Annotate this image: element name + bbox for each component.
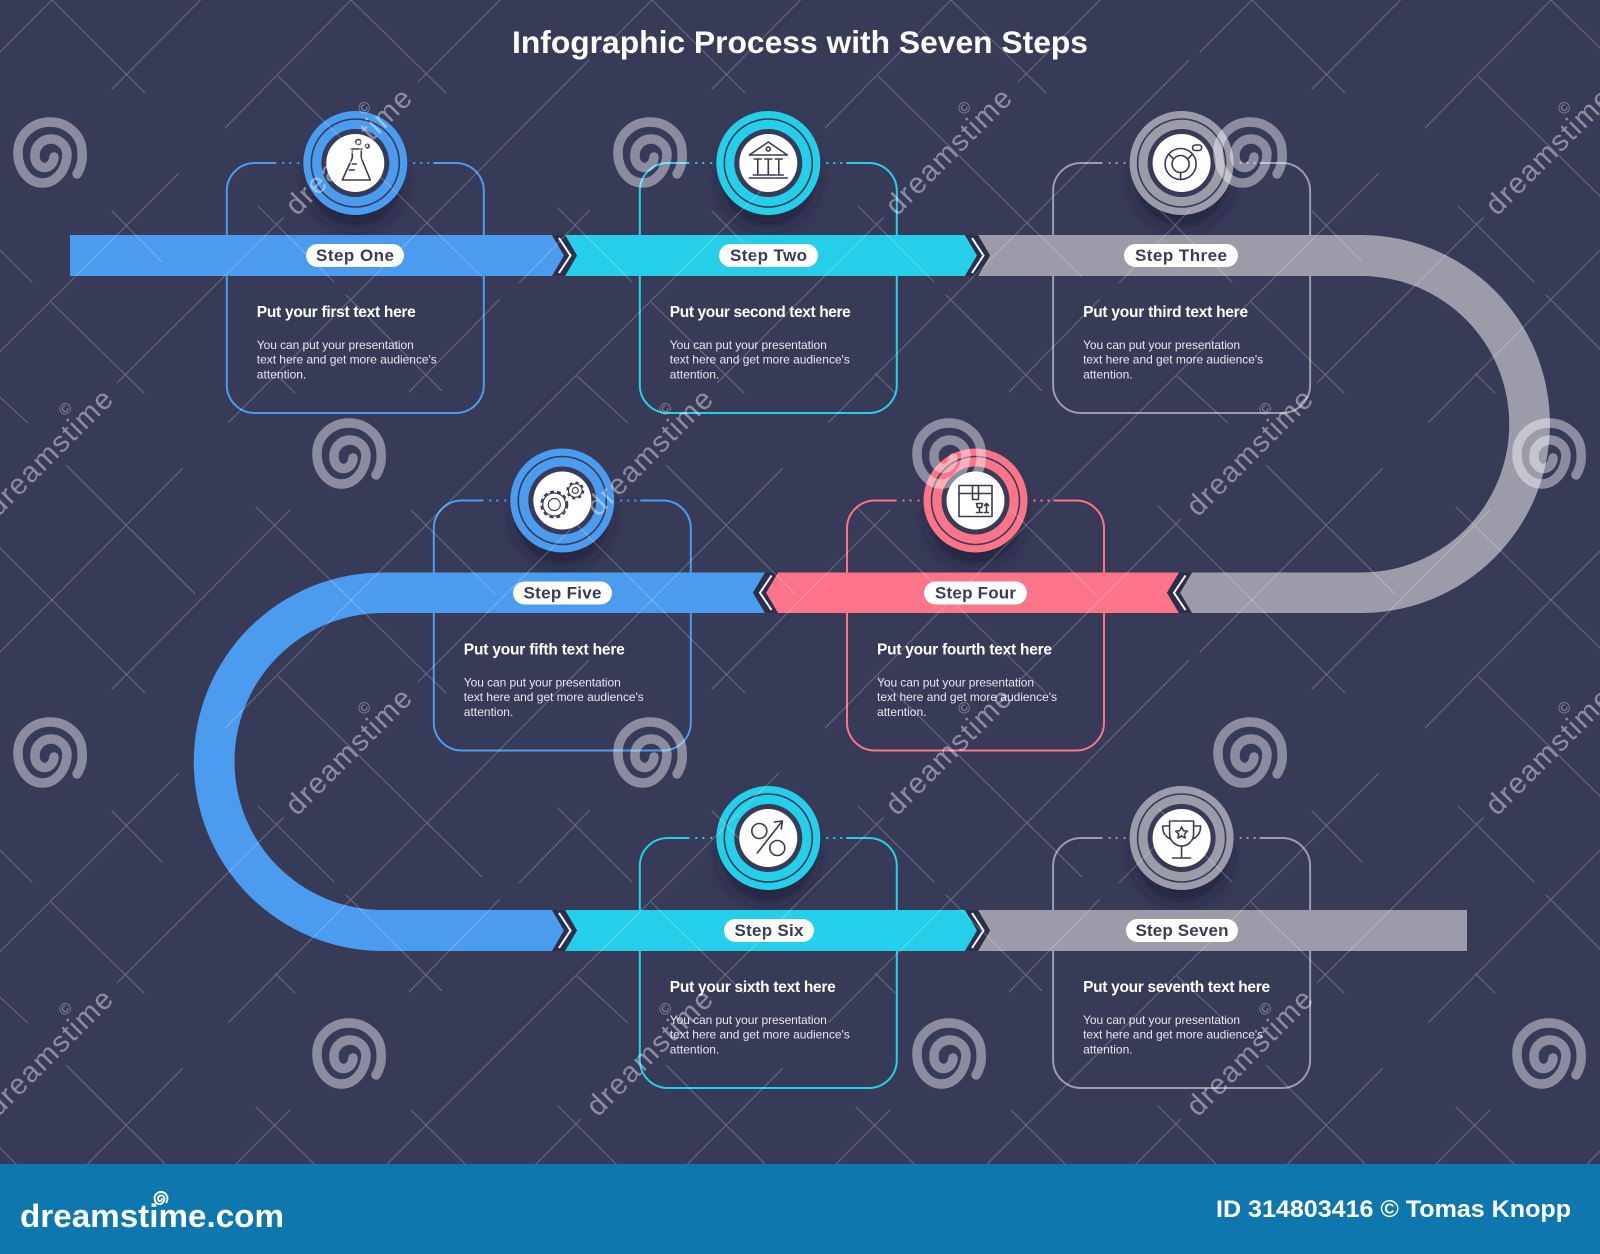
step label: Step Three [1124, 244, 1238, 267]
body text: You can put your presentation [670, 1013, 827, 1027]
heading: Put your second text here [670, 304, 851, 321]
band: step six [565, 910, 977, 951]
step label: Step Four [924, 582, 1027, 604]
watermark: dreamstime text: dreamstime [879, 82, 1019, 222]
step label: Step Three: Step Three [1135, 246, 1227, 265]
watermark: dreamstime text: dreamstime [580, 383, 720, 523]
watermark: dreamstime text: © [1256, 399, 1276, 420]
footer banner [0, 1164, 1600, 1254]
watermark: dreamstime text: dreamstime [879, 682, 1019, 822]
card outline [640, 163, 897, 413]
icon badge: gears [510, 448, 614, 552]
heading: Put your seventh text here [1083, 979, 1270, 996]
panel: step four card: attention. [877, 705, 926, 719]
icon badge: flask [303, 111, 407, 215]
step label: Step Six [724, 919, 814, 942]
footer logo text: dreamstime.com [20, 1198, 284, 1234]
body text: You can put your presentation [877, 676, 1034, 690]
watermark: dreamstime text: dreamstime [279, 682, 419, 822]
panel: step one card: text here and get more audience's [257, 353, 437, 367]
band: step five with curve [194, 572, 765, 951]
band: step four [766, 572, 1179, 613]
watermark: dreamstime text: © [1555, 698, 1575, 719]
circle shadow [515, 470, 609, 564]
card outline [1053, 838, 1310, 1088]
panel: step six card [640, 786, 897, 1088]
card outline [640, 838, 897, 1088]
icon badge: bank [716, 111, 820, 215]
panel: step two card: text here and get more audience's [670, 353, 850, 367]
body text: You can put your presentation [464, 676, 621, 690]
icon badge: trophy [1130, 786, 1234, 890]
watermark: dreamstime text: © [955, 98, 975, 119]
watermark: dreamstime text: © [955, 698, 975, 719]
panel: step six card: text here and get more audience's [670, 1028, 850, 1042]
band: step two [565, 235, 977, 276]
icon badge: package box [924, 448, 1028, 552]
panel: step four card: text here and get more audience's [877, 690, 1057, 704]
card outline [847, 500, 1104, 750]
watermark: dreamstime text: © [56, 399, 76, 420]
icon badge: percent [716, 786, 820, 890]
panel: step one card [227, 111, 484, 413]
step label: Step Seven [1126, 919, 1238, 942]
watermark: dreamstime text: © [355, 98, 375, 119]
step label: Step Six: Step Six [734, 921, 804, 940]
watermark: dreamstime text: © [56, 999, 76, 1020]
watermark: dreamstime text: © [656, 999, 676, 1020]
panel: step seven card [1053, 786, 1310, 1088]
panel: step six card: attention. [670, 1042, 719, 1056]
watermark: dreamstime text: © [1555, 98, 1575, 119]
step label: Step Two [719, 244, 818, 267]
panel: step five card [434, 448, 691, 750]
panel: step five card: text here and get more audience's [464, 690, 644, 704]
watermark: dreamstime text: dreamstime [1180, 383, 1320, 523]
circle shadow [1135, 133, 1229, 227]
heading: Put your first text here [257, 304, 416, 321]
panel: step seven card: text here and get more audience's [1083, 1028, 1263, 1042]
watermark: dreamstime text: © [355, 698, 375, 719]
panel: step three card [1053, 111, 1310, 413]
band: step seven [978, 910, 1467, 951]
body text: You can put your presentation [670, 338, 827, 352]
circle shadow [308, 133, 402, 227]
panel: step four card [847, 448, 1104, 750]
panel: step two card: attention. [670, 367, 719, 381]
card outline [227, 163, 484, 413]
card outline [1053, 163, 1310, 413]
process path: colored bands [70, 235, 1550, 951]
icon badge: donut chart [1130, 111, 1234, 215]
panel: step seven card: attention. [1083, 1042, 1133, 1056]
heading: Put your sixth text here [670, 979, 836, 996]
panel: step two card [640, 111, 897, 413]
panel: step three card: text here and get more audience's [1083, 353, 1263, 367]
watermark: spirals [18, 122, 1581, 1084]
panel: step five card: attention. [464, 705, 513, 719]
band: step one [70, 235, 564, 276]
band: step three with curve [978, 235, 1550, 613]
circle shadow [721, 133, 815, 227]
panel: step three card: attention. [1083, 367, 1133, 381]
circle shadow [928, 470, 1022, 564]
heading: Put your fourth text here [877, 642, 1052, 658]
step label: Step Five [513, 582, 612, 604]
watermark: dreamstime text: dreamstime [1180, 983, 1320, 1123]
footer logo spiral [155, 1192, 167, 1204]
body text: You can put your presentation [1083, 338, 1240, 352]
step label: Step One: Step One [316, 246, 394, 265]
footer credit: ID 314803416 © Tomas Knopp [1216, 1196, 1571, 1223]
watermark: dreamstime text: © [1256, 999, 1276, 1020]
card outline [434, 500, 691, 750]
watermark: dreamstime text: dreamstime [279, 82, 419, 222]
circle shadow [721, 808, 815, 902]
circle shadow [1135, 808, 1229, 902]
step label: Step Five: Step Five [524, 584, 602, 602]
arrows: chevron separators [552, 235, 1192, 951]
step label: Step Two: Step Two [730, 246, 807, 265]
step label: Step One [306, 244, 404, 267]
step label: Step Seven: Step Seven [1136, 921, 1228, 940]
heading: Put your fifth text here [464, 642, 625, 658]
panel: step one card: attention. [257, 367, 306, 381]
watermark: dreamstime text: dreamstime [580, 983, 720, 1123]
heading: Put your third text here [1083, 304, 1248, 321]
body text: You can put your presentation [1083, 1013, 1240, 1027]
body text: You can put your presentation [257, 338, 414, 352]
title: Infographic Process with Seven Steps [512, 24, 1088, 60]
watermark: dreamstime text: © [656, 399, 676, 420]
step label: Step Four: Step Four [935, 584, 1016, 602]
